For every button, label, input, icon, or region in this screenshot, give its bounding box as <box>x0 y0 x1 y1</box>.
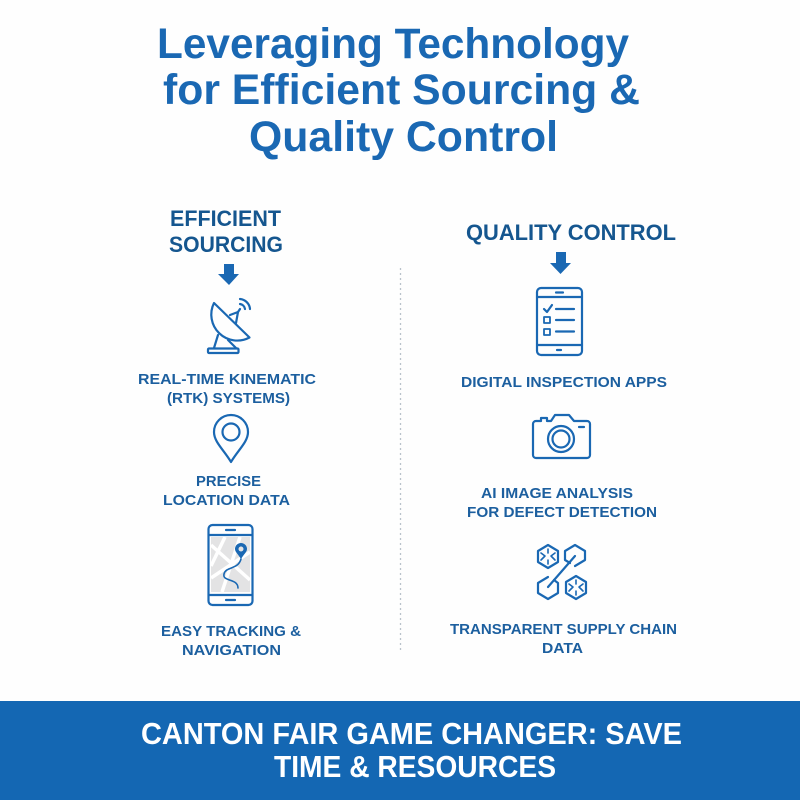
icon: phone with map <box>208 525 252 605</box>
panel: quality control <box>450 220 677 657</box>
icon: supply chain blocks <box>538 545 586 599</box>
icon: satellite dish <box>208 299 250 353</box>
heading: efficient sourcing: EFFICIENT <box>170 206 282 231</box>
label: rtk systems <box>138 371 316 407</box>
panel: efficient sourcing <box>138 206 316 659</box>
arrow: efficient sourcing <box>218 264 239 285</box>
label: precise location data <box>163 473 290 509</box>
arrow: quality control <box>550 252 571 274</box>
heading: efficient sourcing <box>169 206 283 257</box>
heading: quality control: QUALITY CONTROL <box>466 220 676 245</box>
label: easy tracking and navigation: EASY TRACKING & <box>161 623 301 640</box>
label: ai image analysis: FOR DEFECT DETECTION <box>467 504 657 521</box>
label: ai image analysis: AI IMAGE ANALYSIS <box>481 485 633 502</box>
label: easy tracking and navigation: NAVIGATION <box>182 642 281 659</box>
footer banner: TIME & RESOURCES <box>274 749 556 784</box>
label: rtk systems: (RTK) SYSTEMS) <box>167 390 290 407</box>
icon: camera <box>533 415 590 458</box>
label: transparent supply chain data: DATA <box>542 640 583 657</box>
title: for Efficient Sourcing & <box>163 66 640 114</box>
footer banner <box>0 701 800 800</box>
icon: inspection tablet <box>537 288 582 355</box>
label: easy tracking and navigation <box>161 623 301 659</box>
label: digital inspection apps: DIGITAL INSPECTION APPS <box>461 374 667 391</box>
heading: efficient sourcing: SOURCING <box>169 232 283 257</box>
label: transparent supply chain data <box>450 621 677 657</box>
title: Leveraging Technology <box>157 20 629 68</box>
label: transparent supply chain data: TRANSPARENT SUPPLY CHAIN <box>450 621 677 638</box>
title <box>157 20 640 161</box>
label: ai image analysis <box>467 485 657 521</box>
footer banner: CANTON FAIR GAME CHANGER: SAVE <box>141 716 682 751</box>
label: precise location data: LOCATION DATA <box>163 492 290 509</box>
title: Quality Control <box>249 113 558 161</box>
icon: location pin <box>214 415 248 462</box>
label: precise location data: PRECISE <box>196 473 261 490</box>
label: rtk systems: REAL-TIME KINEMATIC <box>138 371 316 388</box>
